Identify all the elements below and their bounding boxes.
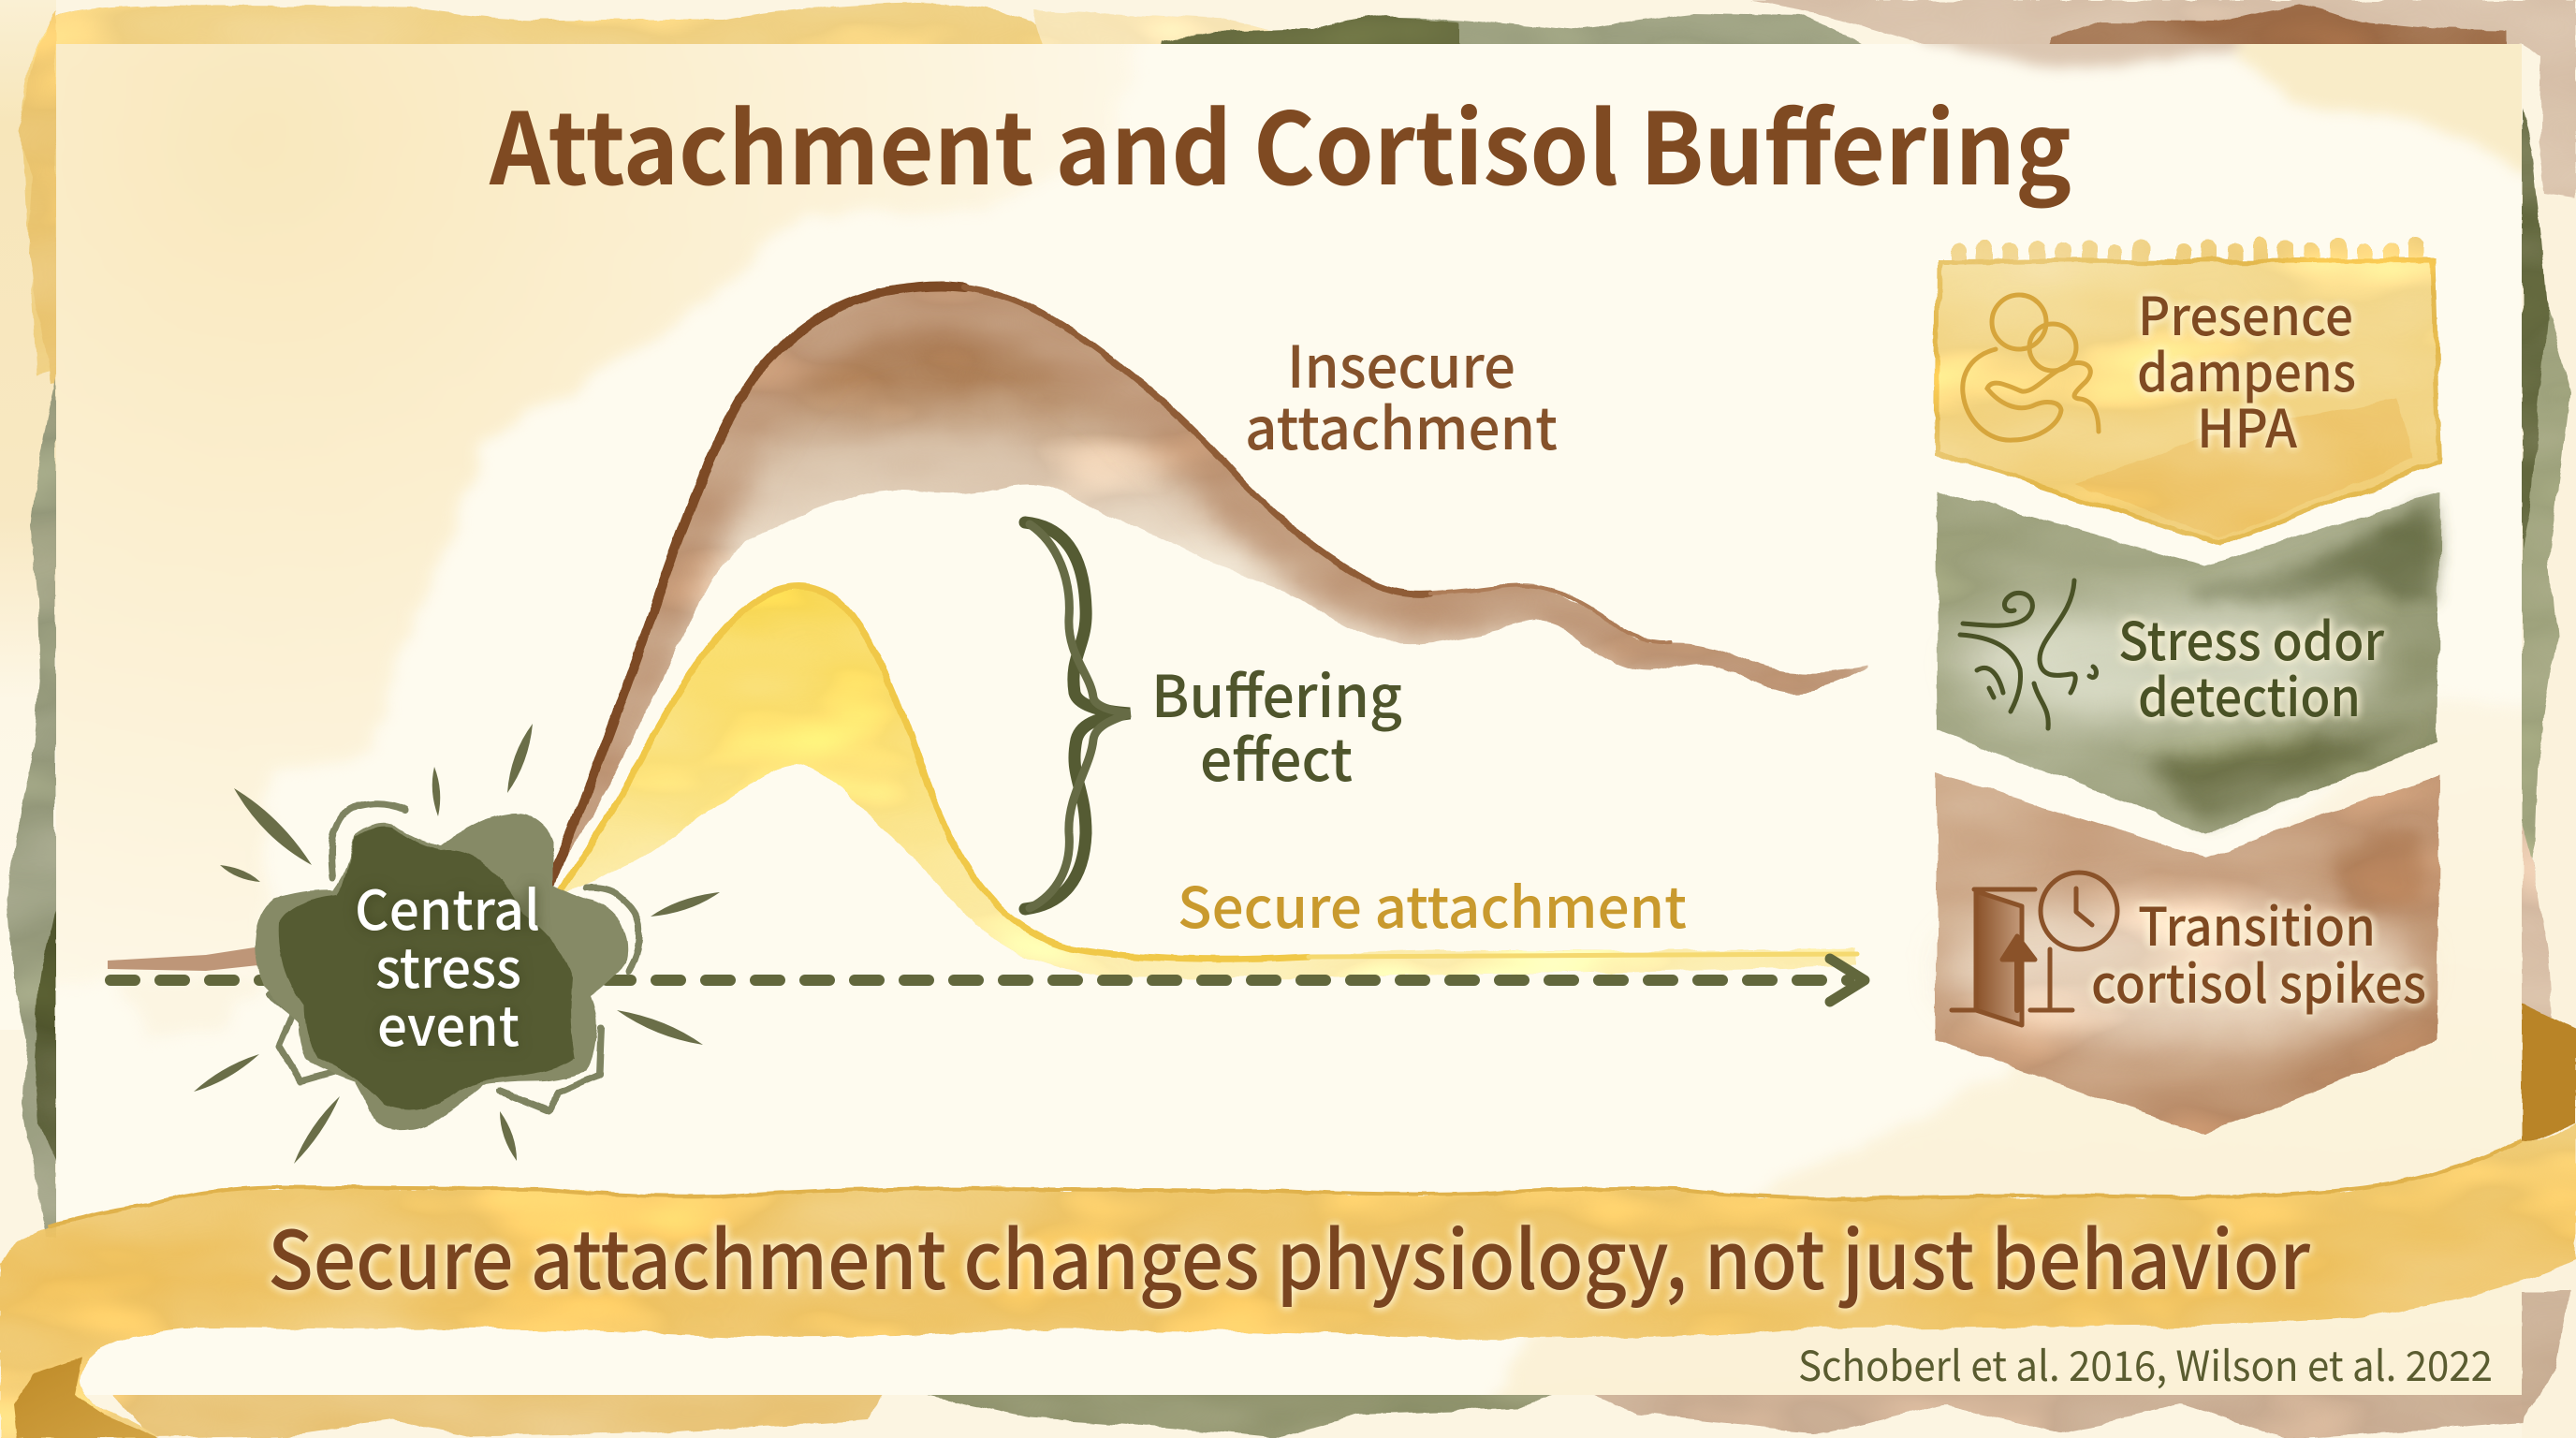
strip: top olive xyxy=(1158,14,1889,56)
ribbon: right fold xyxy=(2522,1004,2576,1142)
card shape xyxy=(1937,490,2439,833)
strip: right tan xyxy=(2522,824,2552,1020)
strip: top brown dark xyxy=(2045,5,2505,56)
text: stress odor detection: detection xyxy=(2138,656,2361,732)
label: buffering effect: effect xyxy=(1200,713,1353,798)
curve: pre-stress brown lead-in xyxy=(108,946,267,971)
icon: odor and nose xyxy=(1960,580,2096,728)
icon: embracing figures xyxy=(1963,295,2099,440)
strip: right olive light xyxy=(2522,309,2570,899)
text: stress odor detection xyxy=(2118,600,2385,732)
text: presence dampens HPA: dampens xyxy=(2137,331,2356,407)
text: transition cortisol spikes: Transition xyxy=(2138,886,2376,961)
card shape xyxy=(1937,245,2439,544)
label: insecure attachment xyxy=(1245,320,1558,466)
strip: top brown light xyxy=(1749,0,2576,197)
wash: top right xyxy=(2233,19,2546,178)
label: central stress event xyxy=(355,867,540,1062)
icon: door with arrow and clock xyxy=(1952,873,2117,1025)
card: presence dampens HPA xyxy=(1937,245,2439,544)
label: buffering effect xyxy=(1151,650,1402,798)
wash: top brown overlap xyxy=(1910,28,2237,67)
label: central stress event: stress xyxy=(375,925,521,1004)
strip: top olive dark end xyxy=(1158,17,1460,56)
strip: left olive dark xyxy=(34,903,56,1161)
secure edge line xyxy=(559,586,1309,960)
curve: insecure attachment xyxy=(534,271,1881,889)
text: presence dampens HPA: HPA xyxy=(2197,388,2297,463)
squiggle outlines xyxy=(269,804,639,1110)
citation: Schoberl et al. 2016, Wilson et al. 2022 xyxy=(1798,1333,2493,1393)
card: stress odor detection xyxy=(1937,490,2439,833)
blob xyxy=(255,813,628,1131)
axis: dashed time arrow xyxy=(110,959,1865,1002)
ribbon: edge lines xyxy=(50,1140,2522,1226)
strip: bottom gold xyxy=(103,1386,886,1438)
label: central stress event: Central xyxy=(355,867,540,946)
insecure body xyxy=(534,271,1881,889)
insecure edge line xyxy=(550,286,1670,883)
text: transition cortisol spikes: cortisol spikes xyxy=(2091,943,2426,1019)
label: insecure attachment: Insecure xyxy=(1287,320,1515,404)
label: secure attachment: Secure attachment xyxy=(1178,863,1687,945)
bottom ribbon banner xyxy=(0,1004,2576,1438)
wash: top gold xyxy=(22,3,1067,374)
label: buffering effect: Buffering xyxy=(1151,650,1402,734)
label: central stress event: event xyxy=(377,983,520,1062)
strip: right lower brown xyxy=(2522,1292,2569,1418)
wash: below baseline xyxy=(112,978,271,1039)
chart: cortisol response curves xyxy=(108,271,1881,1002)
text: banner statement: Secure attachment changes physiology, not just behavior xyxy=(268,1196,2311,1313)
text: presence dampens HPA xyxy=(2137,275,2356,463)
strip: bottom olive xyxy=(886,1386,1576,1438)
text: presence dampens HPA: Presence xyxy=(2138,275,2353,351)
strip: bottom brown xyxy=(1576,1292,2560,1438)
central stress event burst xyxy=(194,724,720,1164)
strip: right olive dark xyxy=(2522,108,2548,552)
ribbon: left fold xyxy=(13,1357,159,1438)
title: Attachment and Cortisol Buffering xyxy=(489,69,2071,213)
burst rays xyxy=(194,724,720,1164)
secure tail line xyxy=(1309,954,1857,957)
wash: top left xyxy=(28,19,1142,983)
card: transition cortisol spikes xyxy=(1937,772,2439,1135)
text: transition cortisol spikes xyxy=(2091,886,2426,1019)
wash: left gold xyxy=(19,11,56,384)
card shape xyxy=(1937,772,2439,1135)
strip: left olive light xyxy=(7,379,56,1236)
text: stress odor detection: Stress odor xyxy=(2118,600,2385,676)
secure body xyxy=(559,586,1857,977)
brace: buffering effect xyxy=(1025,522,1130,909)
label: insecure attachment: attachment xyxy=(1245,382,1558,466)
wash: bottom right xyxy=(1486,702,2546,1414)
curve: secure attachment xyxy=(559,586,1857,977)
wash: pale gold tail xyxy=(1034,9,1310,56)
ribbon: main band xyxy=(0,1123,2576,1438)
